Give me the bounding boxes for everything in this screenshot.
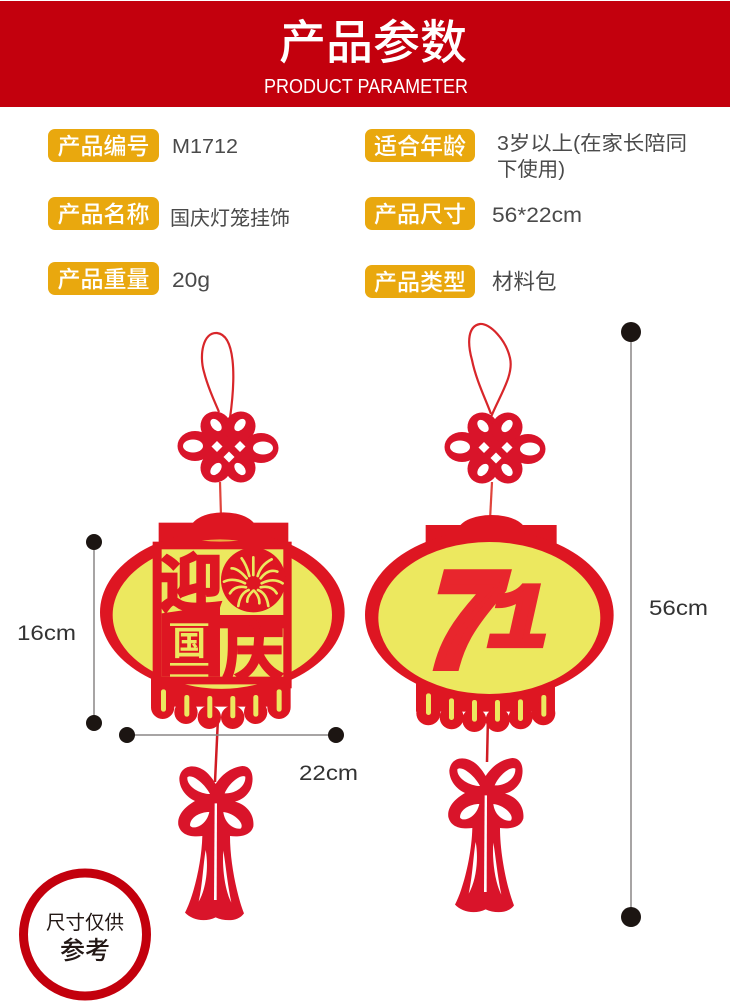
right lantern: [365, 515, 614, 732]
dimension: width 22cm: [119, 727, 358, 785]
spec: product number: 产品编号: [58, 133, 150, 159]
spec: product weight: 产品重量: [58, 266, 150, 292]
spec: suitable age: 下使用): [497, 158, 565, 181]
character: guo: 国: [173, 616, 206, 665]
character: ying: 迎: [159, 534, 222, 625]
right tassel: [448, 758, 523, 912]
character: qing: 庆: [222, 603, 284, 693]
spec: suitable age: 3岁以上(在家长陪同: [497, 132, 687, 155]
spec: product name: 产品名称: [58, 201, 150, 227]
spec: product name: 国庆灯笼挂饰: [170, 207, 290, 230]
left chinese knot: [178, 405, 278, 489]
spec: product weight: [48, 262, 210, 295]
character: guo: [162, 605, 220, 677]
spec: product size: 产品尺寸: [374, 201, 466, 227]
left hanging string: [202, 333, 233, 782]
number 71: 1: [488, 571, 550, 673]
spec: product name: [48, 197, 290, 230]
number 71: [426, 545, 550, 695]
spec: product size: 56*22cm: [492, 204, 582, 227]
title: 产品参数: [279, 16, 467, 69]
spec: product type: [365, 265, 557, 298]
dimension: length 56cm: [621, 322, 708, 927]
right chinese knot: [444, 406, 546, 490]
dimension: height 16cm: [17, 534, 102, 731]
spec: product number: M1712: [172, 136, 238, 158]
subtitle: PRODUCT PARAMETER: [264, 76, 468, 98]
reference-only stamp: 参考: [60, 937, 110, 965]
spec: product size: [365, 197, 582, 230]
header banner: [0, 1, 730, 107]
spec: product weight: 20g: [172, 269, 210, 292]
left lantern: [100, 512, 345, 729]
spec: product number: [48, 129, 238, 162]
firework emblem: [221, 548, 286, 612]
reference-only stamp: 尺寸仅供: [46, 912, 124, 934]
reference-only stamp: [24, 873, 146, 996]
left tassel: [178, 766, 253, 920]
dimension: length 56cm: 56cm: [649, 597, 708, 620]
spec: product type: 材料包: [492, 270, 557, 294]
right hanging string: [469, 324, 511, 762]
dimension: width 22cm: 22cm: [299, 762, 358, 785]
spec: suitable age: [365, 129, 687, 181]
dimension: height 16cm: 16cm: [17, 622, 76, 645]
spec: suitable age: 适合年龄: [374, 133, 466, 159]
number 71: 7: [426, 545, 509, 695]
spec: product type: 产品类型: [374, 269, 466, 295]
